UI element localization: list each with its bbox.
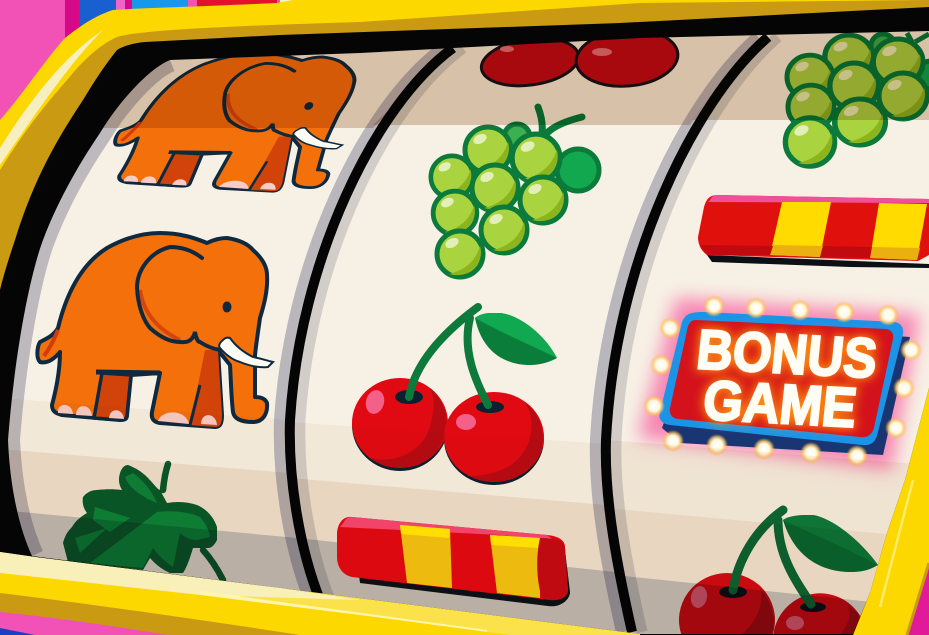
sign text: BONUS: BONUS (694, 318, 880, 390)
bonus game sign: GAME (700, 368, 860, 439)
bonus game sign (638, 295, 922, 470)
sign text: GAME: GAME (700, 368, 860, 439)
cherries: top of middle reel (480, 37, 680, 88)
bonus game sign: BONUS (694, 318, 880, 390)
bar symbol: middle reel (337, 517, 570, 606)
cherries: middle reel (352, 307, 557, 485)
reel separator: left (280, 48, 463, 600)
reel separator: right (596, 37, 778, 632)
elephant top (101, 53, 368, 191)
grapes: middle reel (431, 107, 599, 277)
cherries: right reel (679, 510, 878, 635)
elephant middle (37, 233, 273, 427)
marquee lights (643, 295, 922, 467)
reel left edge shade (8, 60, 170, 556)
bottom frame rail (0, 552, 640, 635)
frame highlight (0, 30, 103, 165)
bar symbol: right reel (698, 195, 929, 268)
right frame rail (853, 388, 929, 635)
green leaf (63, 464, 223, 580)
grapes: right reel (785, 33, 929, 166)
